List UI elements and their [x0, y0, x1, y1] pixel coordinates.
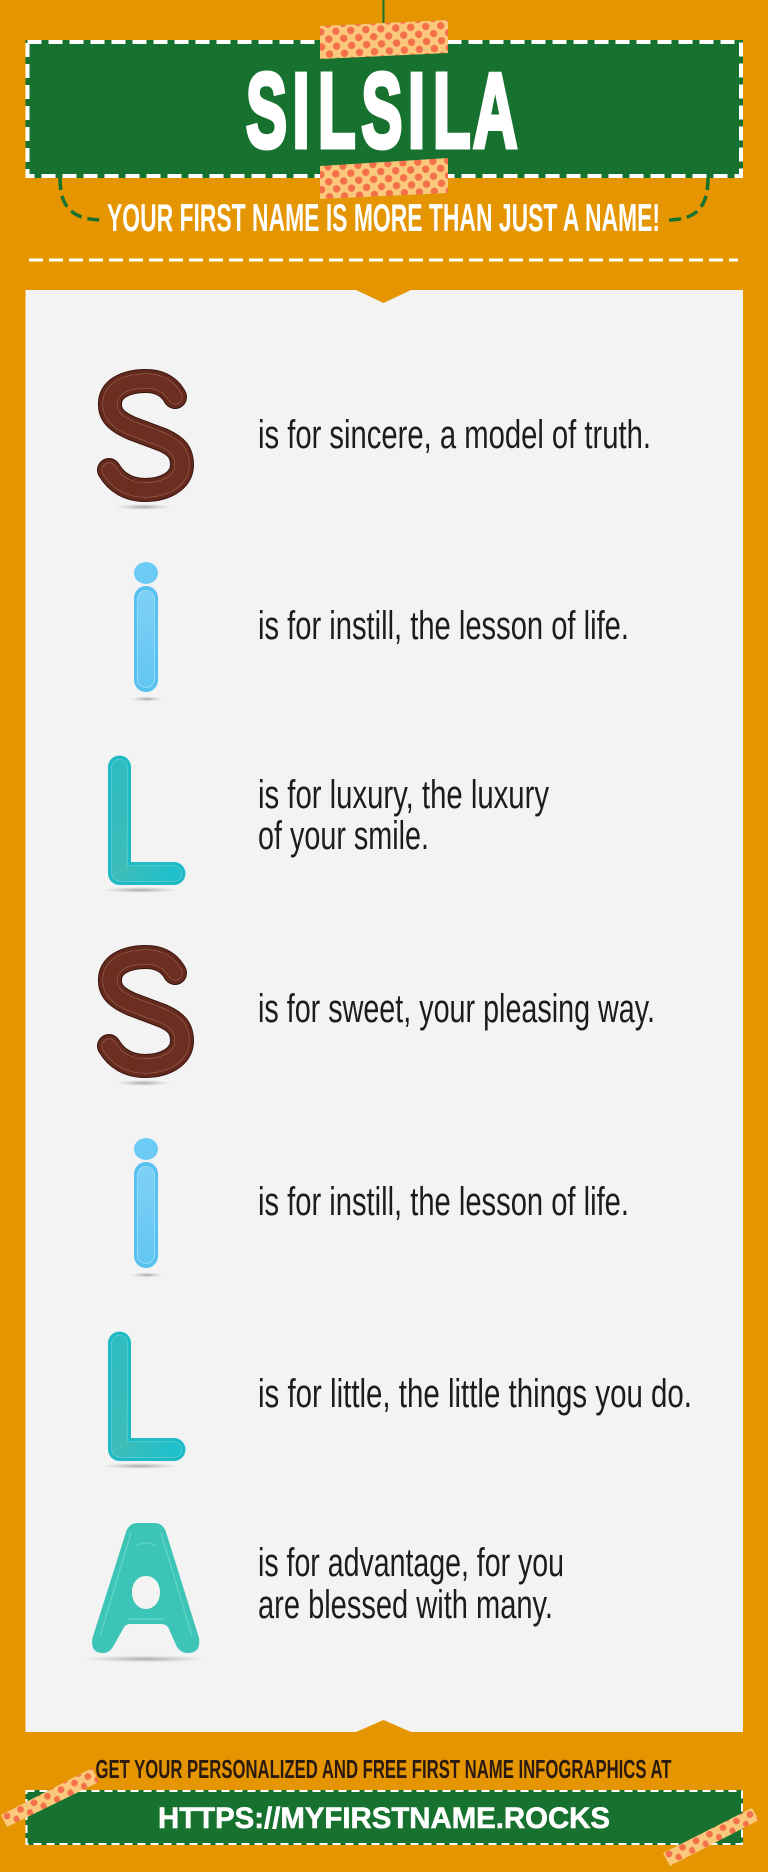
row: S sincere: [109, 381, 651, 510]
text: is for instill, the lesson of life.: [258, 604, 629, 648]
footer bar: [26, 1790, 743, 1845]
text: are blessed with many.: [258, 1583, 553, 1627]
title: SILSILA: [246, 53, 517, 170]
bracket: right: [668, 178, 708, 220]
row: i instill: [131, 1138, 629, 1278]
letter i: [131, 562, 163, 702]
letter L: [102, 1343, 178, 1469]
tape: top: [320, 20, 448, 59]
title banner: [26, 40, 743, 178]
row: A advantage: [83, 1523, 564, 1662]
text: is for luxury, the luxury: [258, 773, 549, 817]
text: is for instill, the lesson of life.: [258, 1180, 629, 1224]
text: [258, 1541, 564, 1627]
row: L luxury: [102, 767, 549, 893]
row: L little: [102, 1343, 692, 1469]
tape: footer left: [1, 1768, 99, 1827]
text: is for advantage, for you: [258, 1541, 564, 1585]
letter S: [109, 381, 182, 510]
letter i: [131, 1138, 163, 1278]
letter A: [83, 1523, 207, 1662]
bracket: left: [60, 178, 103, 220]
panel: letters: [26, 290, 743, 1732]
tape: bottom: [320, 158, 448, 199]
row: i instill: [131, 562, 629, 702]
text: of your smile.: [258, 814, 429, 858]
letter L: [102, 767, 178, 893]
text: [258, 773, 549, 858]
row: S sweet: [109, 957, 655, 1086]
hanging string: [382, 0, 384, 24]
url: HTTPS://MYFIRSTNAME.ROCKS: [158, 1802, 610, 1835]
letter S: [109, 957, 182, 1086]
dashed divider: [29, 258, 738, 262]
tape: footer right: [663, 1808, 759, 1866]
